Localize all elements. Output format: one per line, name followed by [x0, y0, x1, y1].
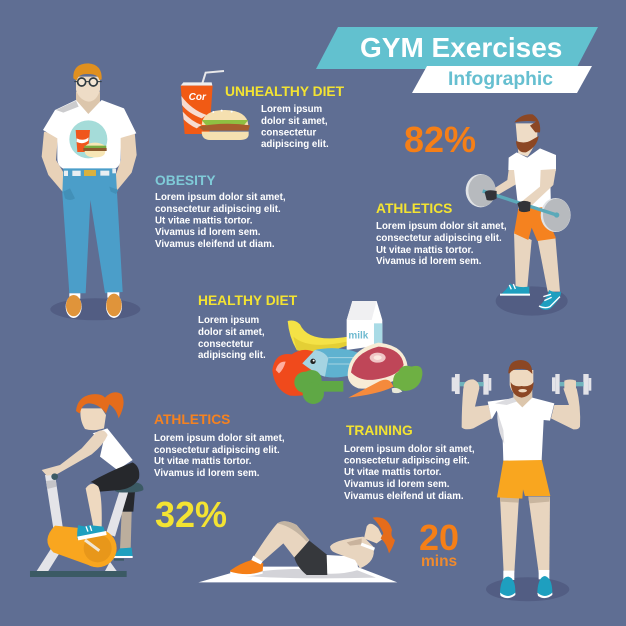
text: training body: Lorem ipsum dolor sit amet, [344, 444, 475, 455]
food: soda and burger icon [181, 71, 250, 140]
title banner [316, 27, 598, 93]
text: unhealthy diet body: adipiscing elit. [261, 139, 329, 150]
food: healthy food group [272, 301, 422, 404]
text: athletics right body: Lorem ipsum dolor sit amet, [376, 221, 507, 232]
text: athletics left body: consectetur adipiscing elit. [154, 445, 280, 456]
text: training body: Ut vitae mattis tortor. [344, 467, 442, 478]
figure: woman on exercise bike [30, 392, 143, 577]
figure: obese man [42, 63, 140, 320]
figure: barbell man [466, 114, 571, 316]
text: obesity body: Vivamus id lorem sem. [155, 227, 261, 238]
figure: woman doing sit-ups [198, 517, 397, 582]
heading: unhealthy diet: UNHEALTHY DIET [225, 84, 345, 99]
text: athletics left body: Vivamus id lorem sem. [154, 468, 260, 479]
text: healthy diet body: dolor sit amet, [198, 327, 265, 338]
text: training body: Vivamus eleifend ut diam. [344, 491, 464, 502]
text: athletics right body: Vivamus id lorem sem. [376, 256, 482, 267]
title banner: GYM Exercises [360, 32, 562, 63]
text: obesity body: Ut vitae mattis tortor. [155, 216, 253, 226]
text: unhealthy diet body: consectetur [261, 128, 316, 138]
text: athletics left body: Lorem ipsum dolor sit amet, [154, 433, 285, 444]
text: unhealthy diet body: Lorem ipsum [261, 104, 323, 115]
text: healthy diet body: Lorem ipsum [198, 315, 260, 326]
text: obesity body: Vivamus eleifend ut diam. [155, 239, 275, 250]
text: training body: Vivamus id lorem sem. [344, 479, 450, 490]
figure: dumbbell man [452, 360, 591, 601]
text: training body: consectetur adipiscing elit. [344, 456, 470, 466]
food: healthy food group: milk [348, 330, 369, 341]
text: healthy diet body: consectetur [198, 339, 253, 350]
text: healthy diet body: adipiscing elit. [198, 350, 266, 361]
stat: 20 mins: mins [421, 553, 457, 570]
food: soda and burger icon: Cor [189, 92, 207, 103]
stat: 82%: 82% [404, 119, 476, 160]
heading: training: TRAINING [346, 423, 413, 438]
heading: obesity: OBESITY [155, 173, 216, 188]
text: athletics right body: Ut vitae mattis tortor. [376, 245, 474, 256]
heading: athletics (left): ATHLETICS [154, 412, 230, 427]
heading: healthy diet: HEALTHY DIET [198, 293, 298, 308]
text: obesity body: Lorem ipsum dolor sit amet, [155, 192, 286, 203]
heading: athletics (right): ATHLETICS [376, 201, 452, 216]
text: athletics left body: Ut vitae mattis tortor. [154, 456, 252, 467]
stat: 20 mins: 20 [419, 517, 459, 558]
text: unhealthy diet body: dolor sit amet, [261, 116, 328, 127]
text: obesity body: consectetur adipiscing elit. [155, 204, 281, 215]
title banner: Infographic [448, 69, 553, 90]
stat: 32%: 32% [155, 494, 227, 535]
text: athletics right body: consectetur adipiscing elit. [376, 233, 502, 244]
